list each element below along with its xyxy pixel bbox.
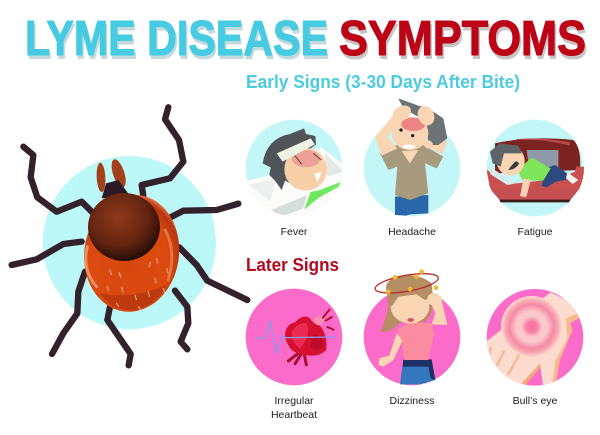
labels: Irregular bbox=[274, 395, 314, 407]
heading: early signs: Early Signs (3-30 Days After Bite) bbox=[246, 72, 520, 92]
tick illustration bbox=[12, 107, 247, 365]
circle: bull's eye bbox=[486, 289, 584, 386]
tick shield bbox=[88, 193, 160, 261]
bull's eye rash bbox=[501, 296, 562, 357]
labels bbox=[271, 226, 558, 421]
circle: headache bbox=[364, 98, 460, 216]
circle: irregular heartbeat bbox=[246, 289, 342, 385]
labels: Bull’s eye bbox=[513, 395, 558, 407]
tick legs bbox=[12, 107, 247, 365]
circle: fatigue bbox=[487, 120, 584, 216]
sofa seat bbox=[487, 167, 584, 189]
labels: Heartbeat bbox=[271, 409, 317, 421]
labels: Fatigue bbox=[517, 226, 553, 238]
title: LYME DISEASE bbox=[26, 16, 330, 70]
title bbox=[25, 12, 588, 70]
title: LYME DISEASE bbox=[25, 12, 328, 66]
labels: Dizziness bbox=[390, 395, 434, 407]
labels: Headache bbox=[388, 226, 436, 238]
sofa back bbox=[495, 138, 580, 173]
labels: Fever bbox=[281, 226, 308, 238]
circle: dizziness bbox=[364, 269, 460, 385]
tick body bbox=[77, 189, 187, 318]
tick mouthparts bbox=[96, 158, 129, 198]
heading: later signs: Later Signs bbox=[246, 255, 339, 275]
circle: fever bbox=[243, 120, 347, 220]
